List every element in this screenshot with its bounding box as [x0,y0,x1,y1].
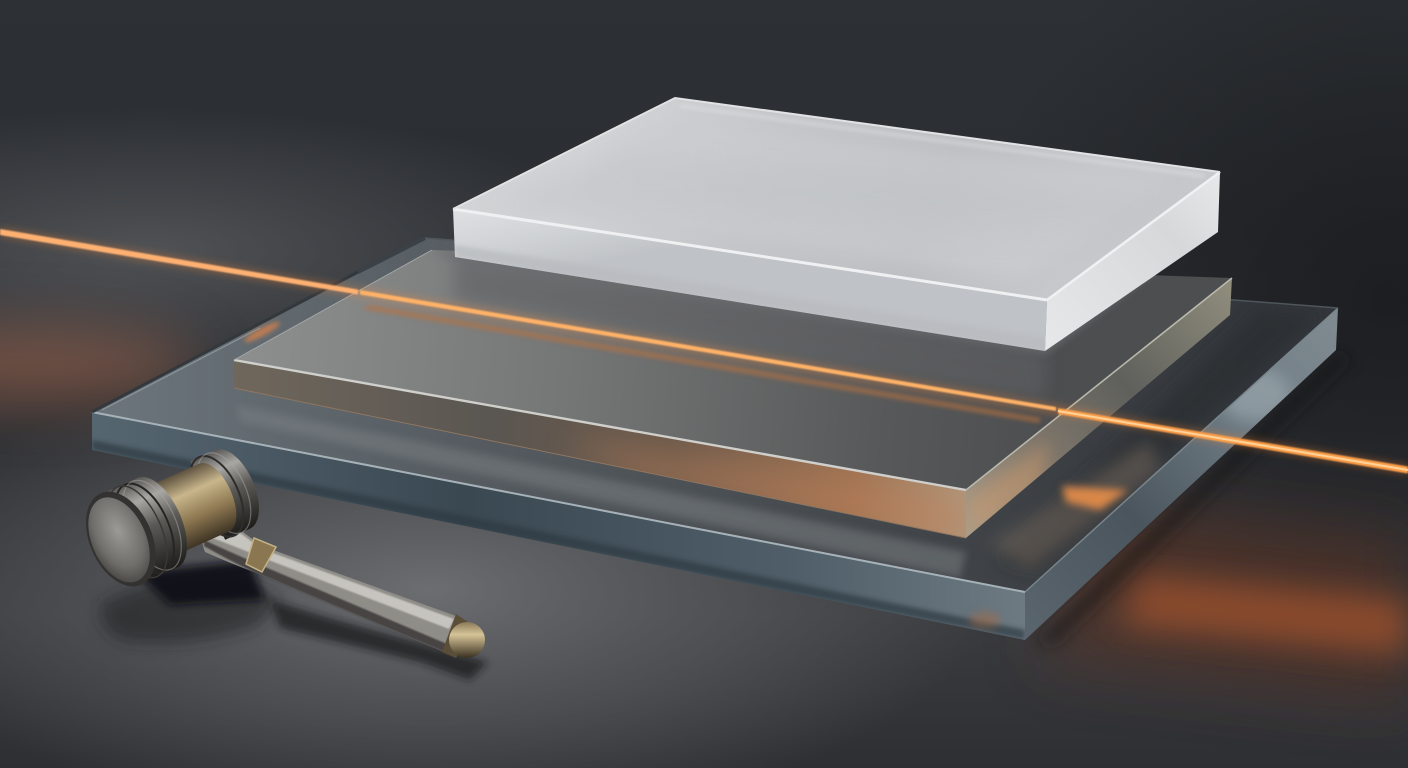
frosted slab surface banding [544,113,1202,248]
middle slab reflection of frosted slab [362,250,1160,423]
gavel shadow [100,560,488,680]
slab shadow [1035,352,1352,645]
gavel head [72,435,273,597]
gavel handle tip [442,614,485,658]
gavel rear cap [179,441,270,545]
gavel handle [202,518,456,652]
gavel collar [246,538,276,572]
orange floor glow left [0,327,200,403]
glow on glass near front [1062,486,1128,510]
laser line [0,229,1408,474]
gavel [72,435,485,658]
orange floor glow right [1040,500,1408,700]
laser left segment [0,229,358,294]
bottom slab inner lighter band [236,310,1320,578]
gavel face [72,481,170,597]
gavel front cap [95,468,199,586]
laser middle segment [360,290,1056,411]
top frosted slab [453,98,1220,351]
laser right segment [1058,408,1408,474]
bottom glass slab [92,238,1338,640]
middle glass slab [234,250,1232,538]
gavel brass band [150,456,246,553]
